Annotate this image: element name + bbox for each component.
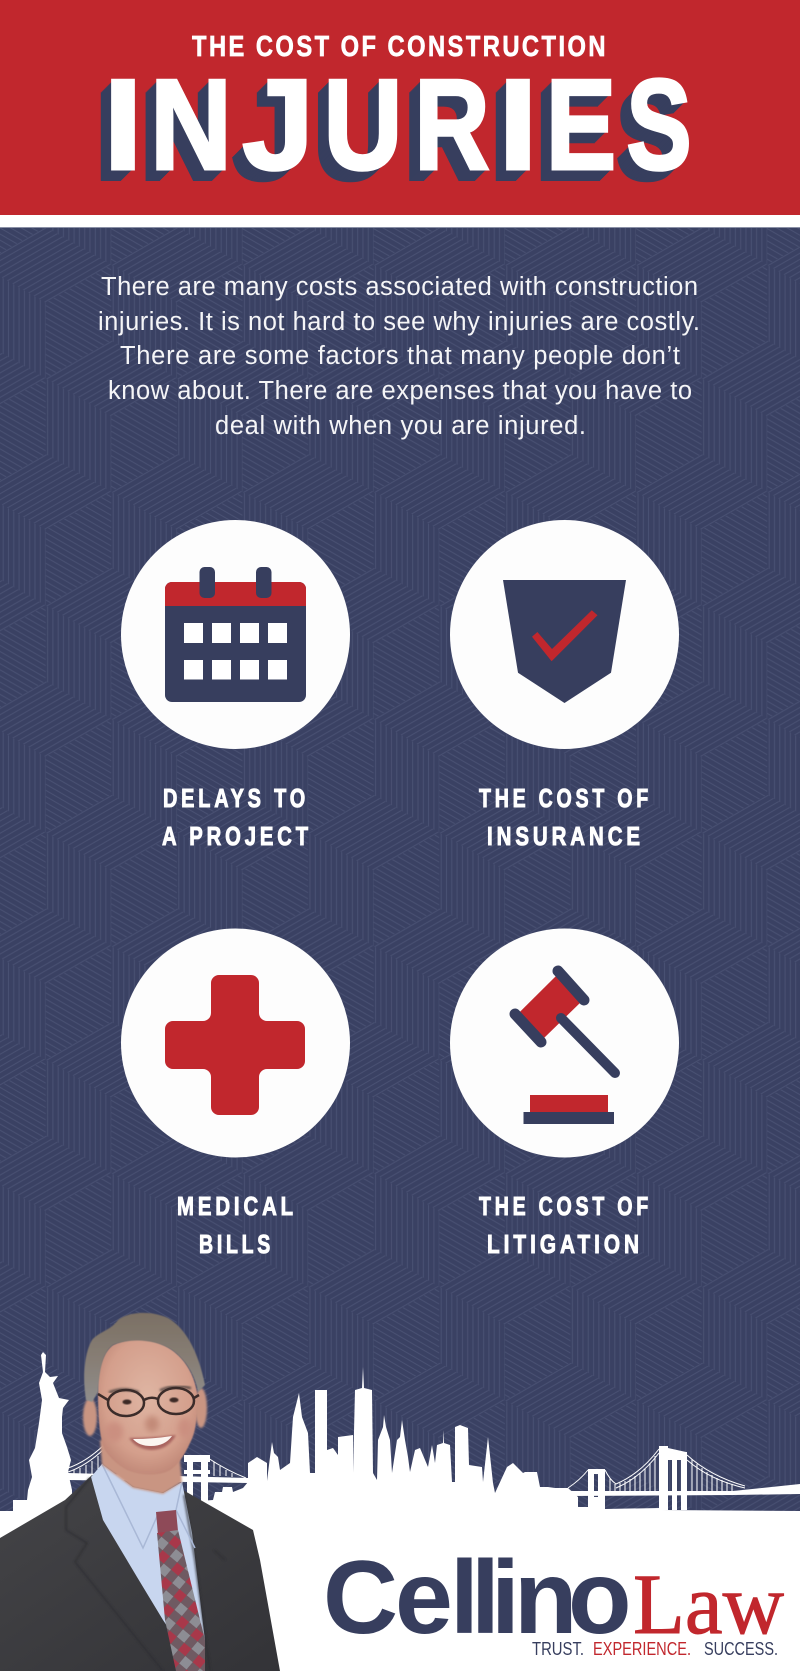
label: the cost of insurance: INSURANCE	[487, 821, 644, 851]
logo wordmark: cellino: Cellino	[323, 1540, 632, 1656]
title word: injuries with navy block shadow: N	[150, 53, 232, 197]
label: the cost of litigation	[479, 1191, 652, 1259]
label: the cost of insurance: THE COST OF	[479, 783, 652, 813]
intro paragraph: deal with when you are injured.	[215, 412, 586, 440]
tagline: EXPERIENCE.	[593, 1638, 691, 1659]
shirt and collar	[91, 1464, 205, 1671]
tagline: TRUST.	[532, 1638, 584, 1659]
title word: injuries with navy block shadow: R	[414, 53, 490, 197]
icon: gavel	[450, 928, 679, 1158]
label: the cost of litigation: LITIGATION	[487, 1229, 643, 1259]
eyebrows	[110, 1386, 190, 1392]
panel: the cost of litigation	[450, 928, 679, 1259]
lapel shading	[66, 1478, 225, 1671]
title word: injuries with navy block shadow: U	[323, 53, 403, 197]
hair	[84, 1313, 205, 1402]
panel: red header band	[0, 0, 800, 215]
title word: injuries with navy block shadow	[100, 53, 692, 197]
icon: shield with check	[450, 520, 679, 749]
title word: injuries with navy block shadow: I	[498, 53, 538, 197]
smile	[129, 1435, 176, 1450]
logo: cellino law	[323, 1540, 784, 1659]
panel: medical bills	[121, 928, 350, 1259]
icon: medical cross	[121, 928, 350, 1158]
glasses	[98, 1388, 199, 1416]
label: the cost of litigation: THE COST OF	[479, 1191, 652, 1221]
intro paragraph: There are many costs associated with construction	[101, 273, 698, 301]
tagline: SUCCESS.	[704, 1638, 778, 1659]
facial shading	[105, 1416, 192, 1442]
collar shading	[102, 1464, 195, 1548]
face	[98, 1339, 197, 1474]
eyes	[122, 1398, 178, 1404]
white divider band	[0, 215, 800, 227]
logo wordmark: law: Law	[633, 1556, 784, 1652]
label: the cost of insurance	[479, 783, 652, 851]
title word: injuries with navy block shadow: J	[242, 53, 314, 197]
intro paragraph: know about. There are expenses that you have to	[108, 377, 692, 405]
label: delays to a project	[162, 783, 312, 851]
left bridge	[68, 1445, 248, 1501]
illustration: new york skyline silhouette	[0, 1352, 800, 1671]
intro paragraph: injuries. It is not hard to see why injuries are costly.	[98, 308, 700, 336]
panel: the cost of insurance	[450, 520, 679, 851]
label: medical bills: BILLS	[199, 1229, 274, 1259]
label: medical bills: MEDICAL	[177, 1191, 297, 1221]
right bridge with towers	[568, 1446, 800, 1510]
title word: injuries with navy block shadow: E	[546, 53, 616, 197]
intro paragraph: There are some factors that many people don’t	[120, 342, 680, 370]
portrait: smiling man in suit and glasses	[0, 1313, 280, 1671]
ears and neck	[83, 1388, 207, 1494]
label: delays to a project: A PROJECT	[162, 821, 312, 851]
intro paragraph	[98, 273, 700, 440]
icon: calendar	[121, 520, 350, 749]
title word: injuries with navy block shadow: I	[103, 53, 143, 197]
label: delays to a project: DELAYS TO	[163, 783, 309, 813]
necktie	[156, 1510, 205, 1671]
panel: delays to a project	[121, 520, 350, 851]
title line: the cost of construction: THE COST OF CONSTRUCTION	[192, 31, 608, 63]
label: medical bills	[177, 1191, 297, 1259]
title word: injuries with navy block shadow: S	[626, 53, 692, 197]
suit jacket	[0, 1475, 280, 1671]
